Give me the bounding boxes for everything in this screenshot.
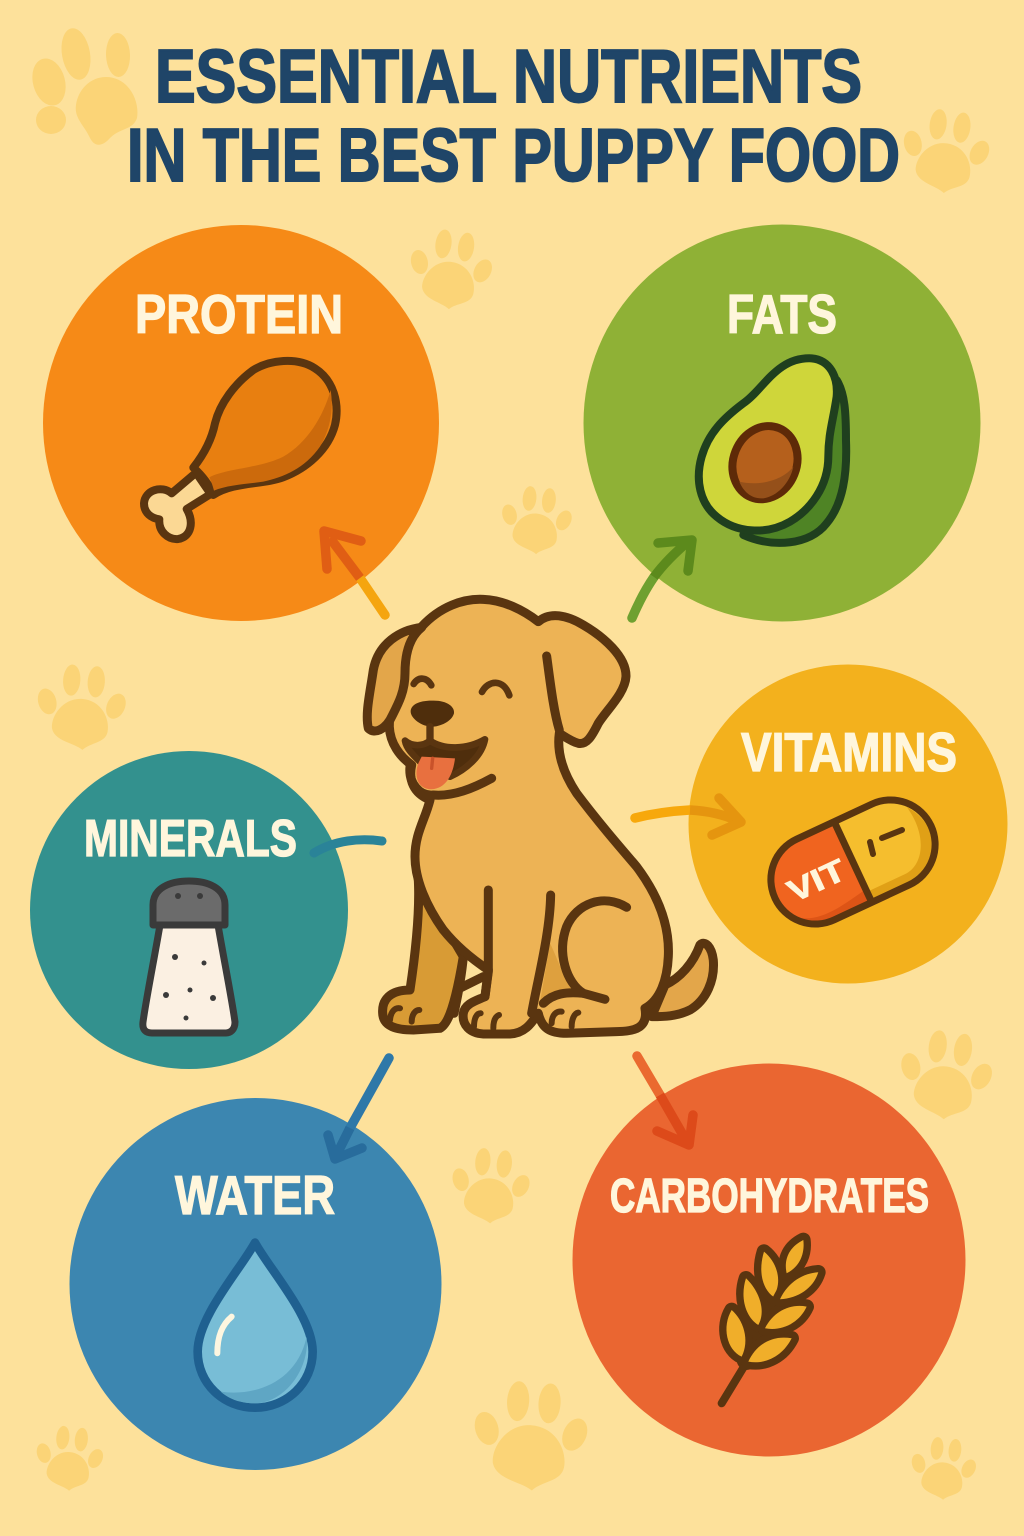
icon: water drop	[198, 1243, 313, 1408]
hind leg arc	[563, 901, 627, 999]
rear leg shade	[540, 943, 572, 1003]
icon: vitamin capsule: VIT	[782, 852, 851, 909]
illustration: puppy	[367, 599, 714, 1034]
body and head	[389, 599, 668, 1034]
panel: protein	[43, 225, 439, 621]
icon: salt shaker	[143, 881, 235, 1033]
panel: vitamins	[688, 664, 1008, 984]
heading: vitamins: VITAMINS	[741, 721, 957, 783]
mouth	[405, 739, 485, 777]
title: ESSENTIAL NUTRIENTS	[155, 34, 862, 118]
tail	[652, 943, 714, 1017]
far rear leg	[383, 880, 463, 1030]
arrow: to carbohydrates	[637, 1056, 693, 1145]
arrow: to fats	[632, 540, 692, 618]
arrow: to water	[328, 1058, 389, 1159]
arrow: to vitamins	[635, 798, 741, 835]
heading: fats: FATS	[727, 283, 837, 345]
arrow: to minerals	[314, 840, 382, 853]
panel: water	[70, 1098, 442, 1470]
arrow: to protein	[324, 531, 385, 615]
nose	[411, 701, 454, 727]
toes	[390, 1008, 578, 1028]
heading: minerals: MINERALS	[84, 810, 297, 868]
avocado pit	[722, 416, 808, 509]
far ear crease	[547, 656, 559, 730]
chin	[410, 767, 492, 795]
title	[127, 34, 900, 197]
front leg lines	[485, 890, 488, 997]
icon: avocado	[699, 358, 846, 543]
panel: minerals	[30, 751, 348, 1069]
panel: fats	[584, 224, 980, 622]
icon: wheat	[722, 1240, 818, 1403]
tongue	[416, 757, 455, 789]
near ear	[367, 627, 422, 731]
icon: chicken drumstick	[144, 361, 337, 539]
icon: vitamin capsule	[756, 785, 950, 939]
eyes	[414, 679, 431, 685]
heading: water: WATER	[175, 1164, 335, 1226]
panel: carbohydrates	[572, 1064, 966, 1456]
heading: protein: PROTEIN	[135, 283, 343, 345]
